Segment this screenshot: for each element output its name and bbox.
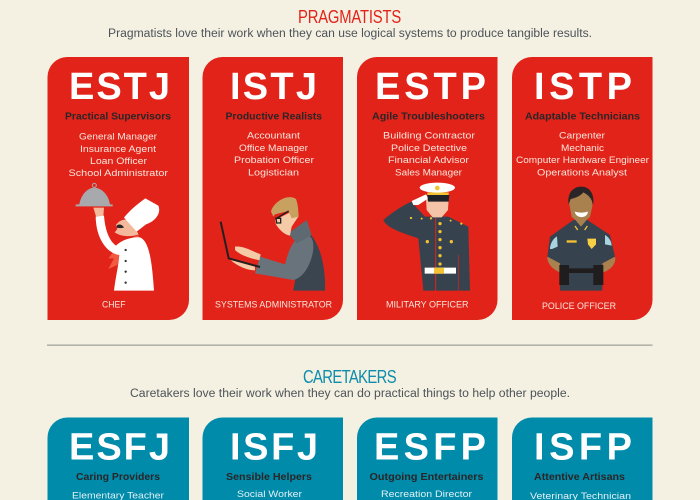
panel: ESTJ: School Administrator xyxy=(68,168,169,179)
panel: ISTJ: Probation Officer xyxy=(234,155,315,166)
panel: ISFP xyxy=(512,418,652,500)
subtitle: caretakers: Caretakers love their work when they can do practical things to help other people. xyxy=(130,388,570,400)
panel: ISFP: ISFP xyxy=(534,426,632,468)
panel: ISTP: ISTP xyxy=(534,66,632,108)
panel: ESFJ: Caring Providers xyxy=(76,472,160,483)
panel: ISTJ: Logistician xyxy=(248,168,299,178)
panel: ESTP: ESTP xyxy=(375,66,486,108)
panel: ESTP: Financial Advisor xyxy=(388,155,470,166)
title: pragmatists: PRAGMATISTS xyxy=(298,6,401,27)
panel: ISTJ: Accountant xyxy=(247,130,300,142)
panel: ISFJ xyxy=(202,418,343,500)
panel: ESTJ: Practical Supervisors xyxy=(65,112,171,122)
panel: ISTJ: SYSTEMS ADMINISTRATOR xyxy=(215,300,332,310)
panel: ISFJ: Sensible Helpers xyxy=(226,472,312,483)
panel: ISTJ: Office Manager xyxy=(239,143,309,154)
icon: police officer xyxy=(547,187,615,291)
panel: ISFJ: ISFJ xyxy=(230,426,318,468)
panel: ISFP: Attentive Artisans xyxy=(534,472,625,483)
panel: ESFP: Recreation Director xyxy=(381,489,473,500)
panel: ISTJ xyxy=(202,57,343,320)
panel: ISTJ: Productive Realists xyxy=(226,112,322,122)
panel: ISTP: Operations Analyst xyxy=(537,168,627,178)
panel: ESTJ: General Manager xyxy=(79,132,158,142)
panel: ISTP: Computer Hardware Engineer xyxy=(516,155,650,166)
icon: systems administrator xyxy=(221,197,325,291)
panel: ESFP: Outgoing Entertainers xyxy=(370,472,484,483)
panel: ESTJ: CHEF xyxy=(102,300,126,310)
panel: ISTP: POLICE OFFICER xyxy=(542,301,616,312)
panel: ISTP: Mechanic xyxy=(561,143,604,154)
panel: ESTP: Police Detective xyxy=(391,143,467,154)
panel: ISFJ: Social Worker xyxy=(237,489,303,500)
panel: ESFP xyxy=(357,418,498,500)
panel: ESFJ: ESFJ xyxy=(69,426,170,468)
panel: ESTJ xyxy=(48,57,189,320)
panel: ESFJ xyxy=(48,418,189,500)
panel: ISTJ: ISTJ xyxy=(230,66,317,108)
panel: ESFP: ESFP xyxy=(374,426,486,468)
panel: ISTP: Adaptable Technicians xyxy=(525,112,640,122)
panel: ESTP: MILITARY OFFICER xyxy=(386,300,469,310)
icon: military officer xyxy=(383,183,470,291)
subtitle: pragmatists: Pragmatists love their work when they can use logical systems to produce tangible results. xyxy=(108,28,592,40)
panel: ISTP xyxy=(512,57,652,320)
icon: chef xyxy=(76,183,159,291)
panel: ESTP: Agile Troubleshooters xyxy=(372,112,485,122)
panel: ESTJ: Insurance Agent xyxy=(80,144,156,155)
panel: ESTP: Building Contractor xyxy=(383,130,476,142)
panel: ESTJ: ESTJ xyxy=(69,66,170,108)
title: caretakers: CARETAKERS xyxy=(303,366,397,387)
panel: ESTJ: Loan Officer xyxy=(90,156,148,167)
panel: ISTP: Carpenter xyxy=(559,130,606,142)
panel: ESTP: Sales Manager xyxy=(395,168,463,178)
panel: ESTP xyxy=(357,57,498,320)
